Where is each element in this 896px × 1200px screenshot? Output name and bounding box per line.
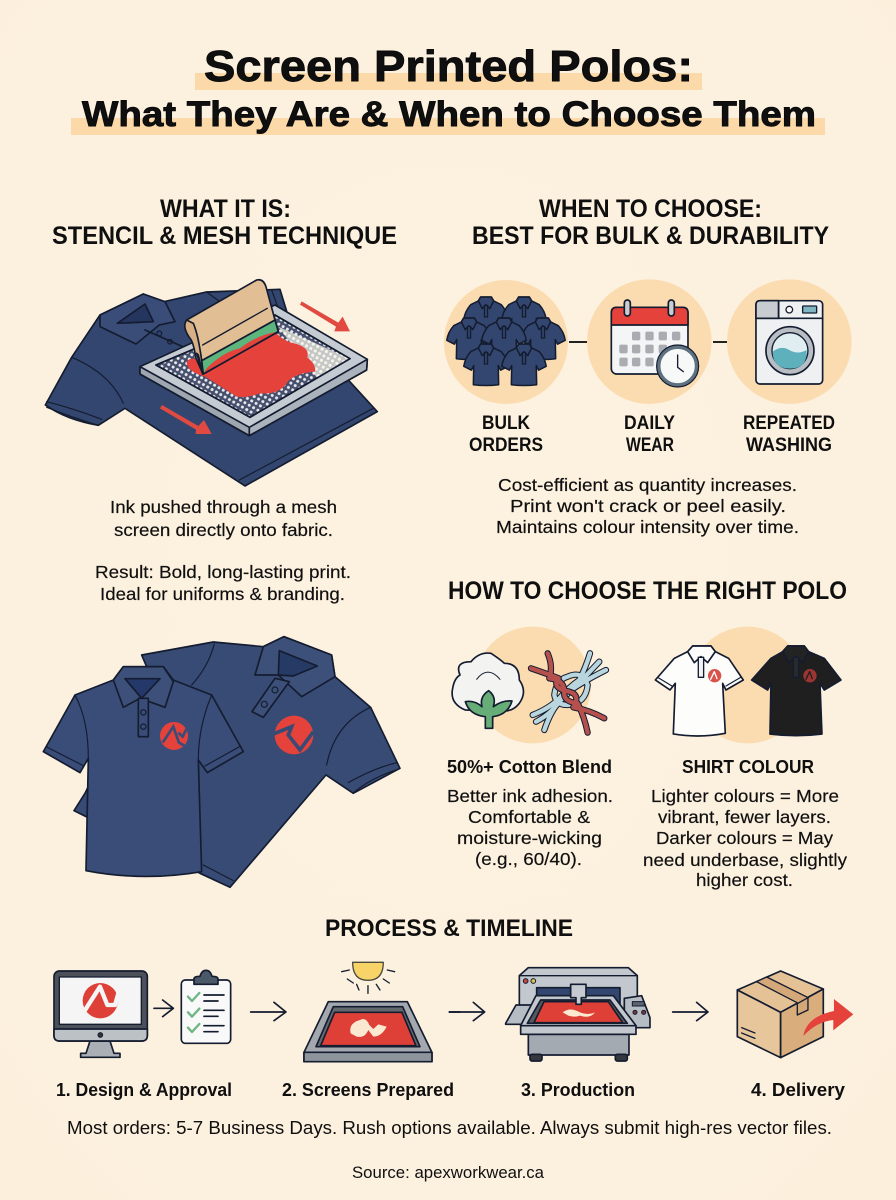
icon: exposed screen <box>304 1002 432 1062</box>
connector lines <box>569 341 727 343</box>
squeegee <box>185 280 278 374</box>
block: cotton blend: 50%+ Cotton Blend <box>447 757 612 777</box>
icon row: when to choose <box>444 279 852 404</box>
block: cotton blend <box>447 757 613 869</box>
front polo <box>43 667 243 876</box>
labels: when to choose icons <box>469 413 835 456</box>
heading: how to choose: HOW TO CHOOSE THE RIGHT POLO <box>448 577 847 605</box>
icon: printing press <box>506 968 650 1061</box>
block: shirt colour: Darker colours = May <box>656 828 833 848</box>
process step labels: 4. Delivery <box>751 1080 845 1100</box>
process icons, left <box>54 962 460 1062</box>
labels: when to choose icons: ORDERS <box>469 435 543 456</box>
black polo <box>752 646 841 736</box>
labels: when to choose icons: WEAR <box>626 435 674 456</box>
block: shirt colour <box>643 757 847 890</box>
cotton boll <box>452 653 523 728</box>
block: shirt colour: higher cost. <box>696 870 793 890</box>
text: what it is description: Ink pushed through a mesh <box>110 497 337 517</box>
heading: when to choose: BEST FOR BULK & DURABILITY <box>472 222 829 250</box>
source: Source: apexworkwear.ca <box>352 1163 545 1182</box>
arrow: monitor to checklist <box>154 1000 173 1017</box>
labels: when to choose icons: DAILY <box>624 413 675 434</box>
icon: shipping box <box>737 971 823 1058</box>
heading: process and timeline: PROCESS & TIMELINE <box>325 915 573 942</box>
back polo <box>74 637 400 887</box>
heading: what it is: WHAT IT IS: <box>160 195 291 223</box>
fibres <box>531 653 606 733</box>
arrow: screen to press <box>449 1002 485 1021</box>
white polo <box>655 646 743 736</box>
text: what it is description <box>95 497 351 604</box>
heading: what it is: STENCIL & MESH TECHNIQUE <box>52 222 397 250</box>
block: shirt colour: Lighter colours = More <box>651 786 839 806</box>
process icons, right <box>449 968 853 1061</box>
process step labels <box>56 1080 845 1100</box>
labels: when to choose icons: WASHING <box>746 435 832 456</box>
process step labels: 1. Design & Approval <box>56 1080 232 1100</box>
icon: cotton and fibres <box>452 627 606 743</box>
icon: white and black polos <box>655 627 841 743</box>
heading: when to choose: WHEN TO CHOOSE: <box>539 195 762 223</box>
back polo logo <box>273 716 313 754</box>
heading: what it is <box>52 195 397 250</box>
text: what it is description: Ideal for uniforms & branding. <box>100 584 345 604</box>
red ink <box>187 332 315 397</box>
block: shirt colour: vibrant, fewer layers. <box>658 807 831 827</box>
arrow: press to delivery <box>673 1002 708 1021</box>
motion arrow upper <box>300 301 350 331</box>
text: when to choose description: Print won't crack or peel easily. <box>510 496 786 516</box>
arrow: delivery <box>803 999 853 1036</box>
text: when to choose description <box>496 475 799 537</box>
arrow: screen to press start <box>449 1009 460 1014</box>
front polo logo <box>160 722 188 750</box>
block: shirt colour: SHIRT COLOUR <box>682 757 814 777</box>
flat polo shirt <box>45 289 377 486</box>
labels: when to choose icons: BULK <box>482 413 530 434</box>
icon: sun <box>342 962 395 993</box>
icon: clipboard checklist <box>181 970 231 1043</box>
screen frame <box>140 305 367 436</box>
illustration: two navy polos with logos <box>43 637 400 887</box>
icon: washing machine <box>727 279 852 404</box>
icon: calendar <box>587 279 712 404</box>
labels: when to choose icons: REPEATED <box>743 413 835 434</box>
footnote: Most orders: 5-7 Business Days. Rush options available. Always submit high-res vector files. <box>67 1118 832 1138</box>
process step labels: 3. Production <box>521 1080 635 1100</box>
motion arrow lower <box>160 405 212 434</box>
process step labels: 2. Screens Prepared <box>282 1080 454 1100</box>
text: when to choose description: Maintains colour intensity over time. <box>496 517 799 537</box>
arrow: checklist to screen <box>251 1002 286 1021</box>
icon: bulk orders <box>444 280 568 404</box>
block: shirt colour: need underbase, slightly <box>643 850 847 870</box>
title: What They Are & When to Choose Them <box>82 95 816 134</box>
title <box>71 42 825 135</box>
heading: when to choose <box>472 195 829 250</box>
illustration: screen printing on a polo <box>45 280 377 486</box>
block: cotton blend: Comfortable & <box>468 807 590 827</box>
block: cotton blend: (e.g., 60/40). <box>475 849 582 869</box>
block: cotton blend: Better ink adhesion. <box>447 786 613 806</box>
text: when to choose description: Cost-efficient as quantity increases. <box>498 475 797 495</box>
icon: monitor <box>54 971 147 1057</box>
title: Screen Printed Polos: <box>204 42 693 91</box>
block: cotton blend: moisture-wicking <box>457 828 602 848</box>
text: what it is description: screen directly onto fabric. <box>114 520 333 540</box>
text: what it is description: Result: Bold, long-lasting print. <box>95 562 351 582</box>
